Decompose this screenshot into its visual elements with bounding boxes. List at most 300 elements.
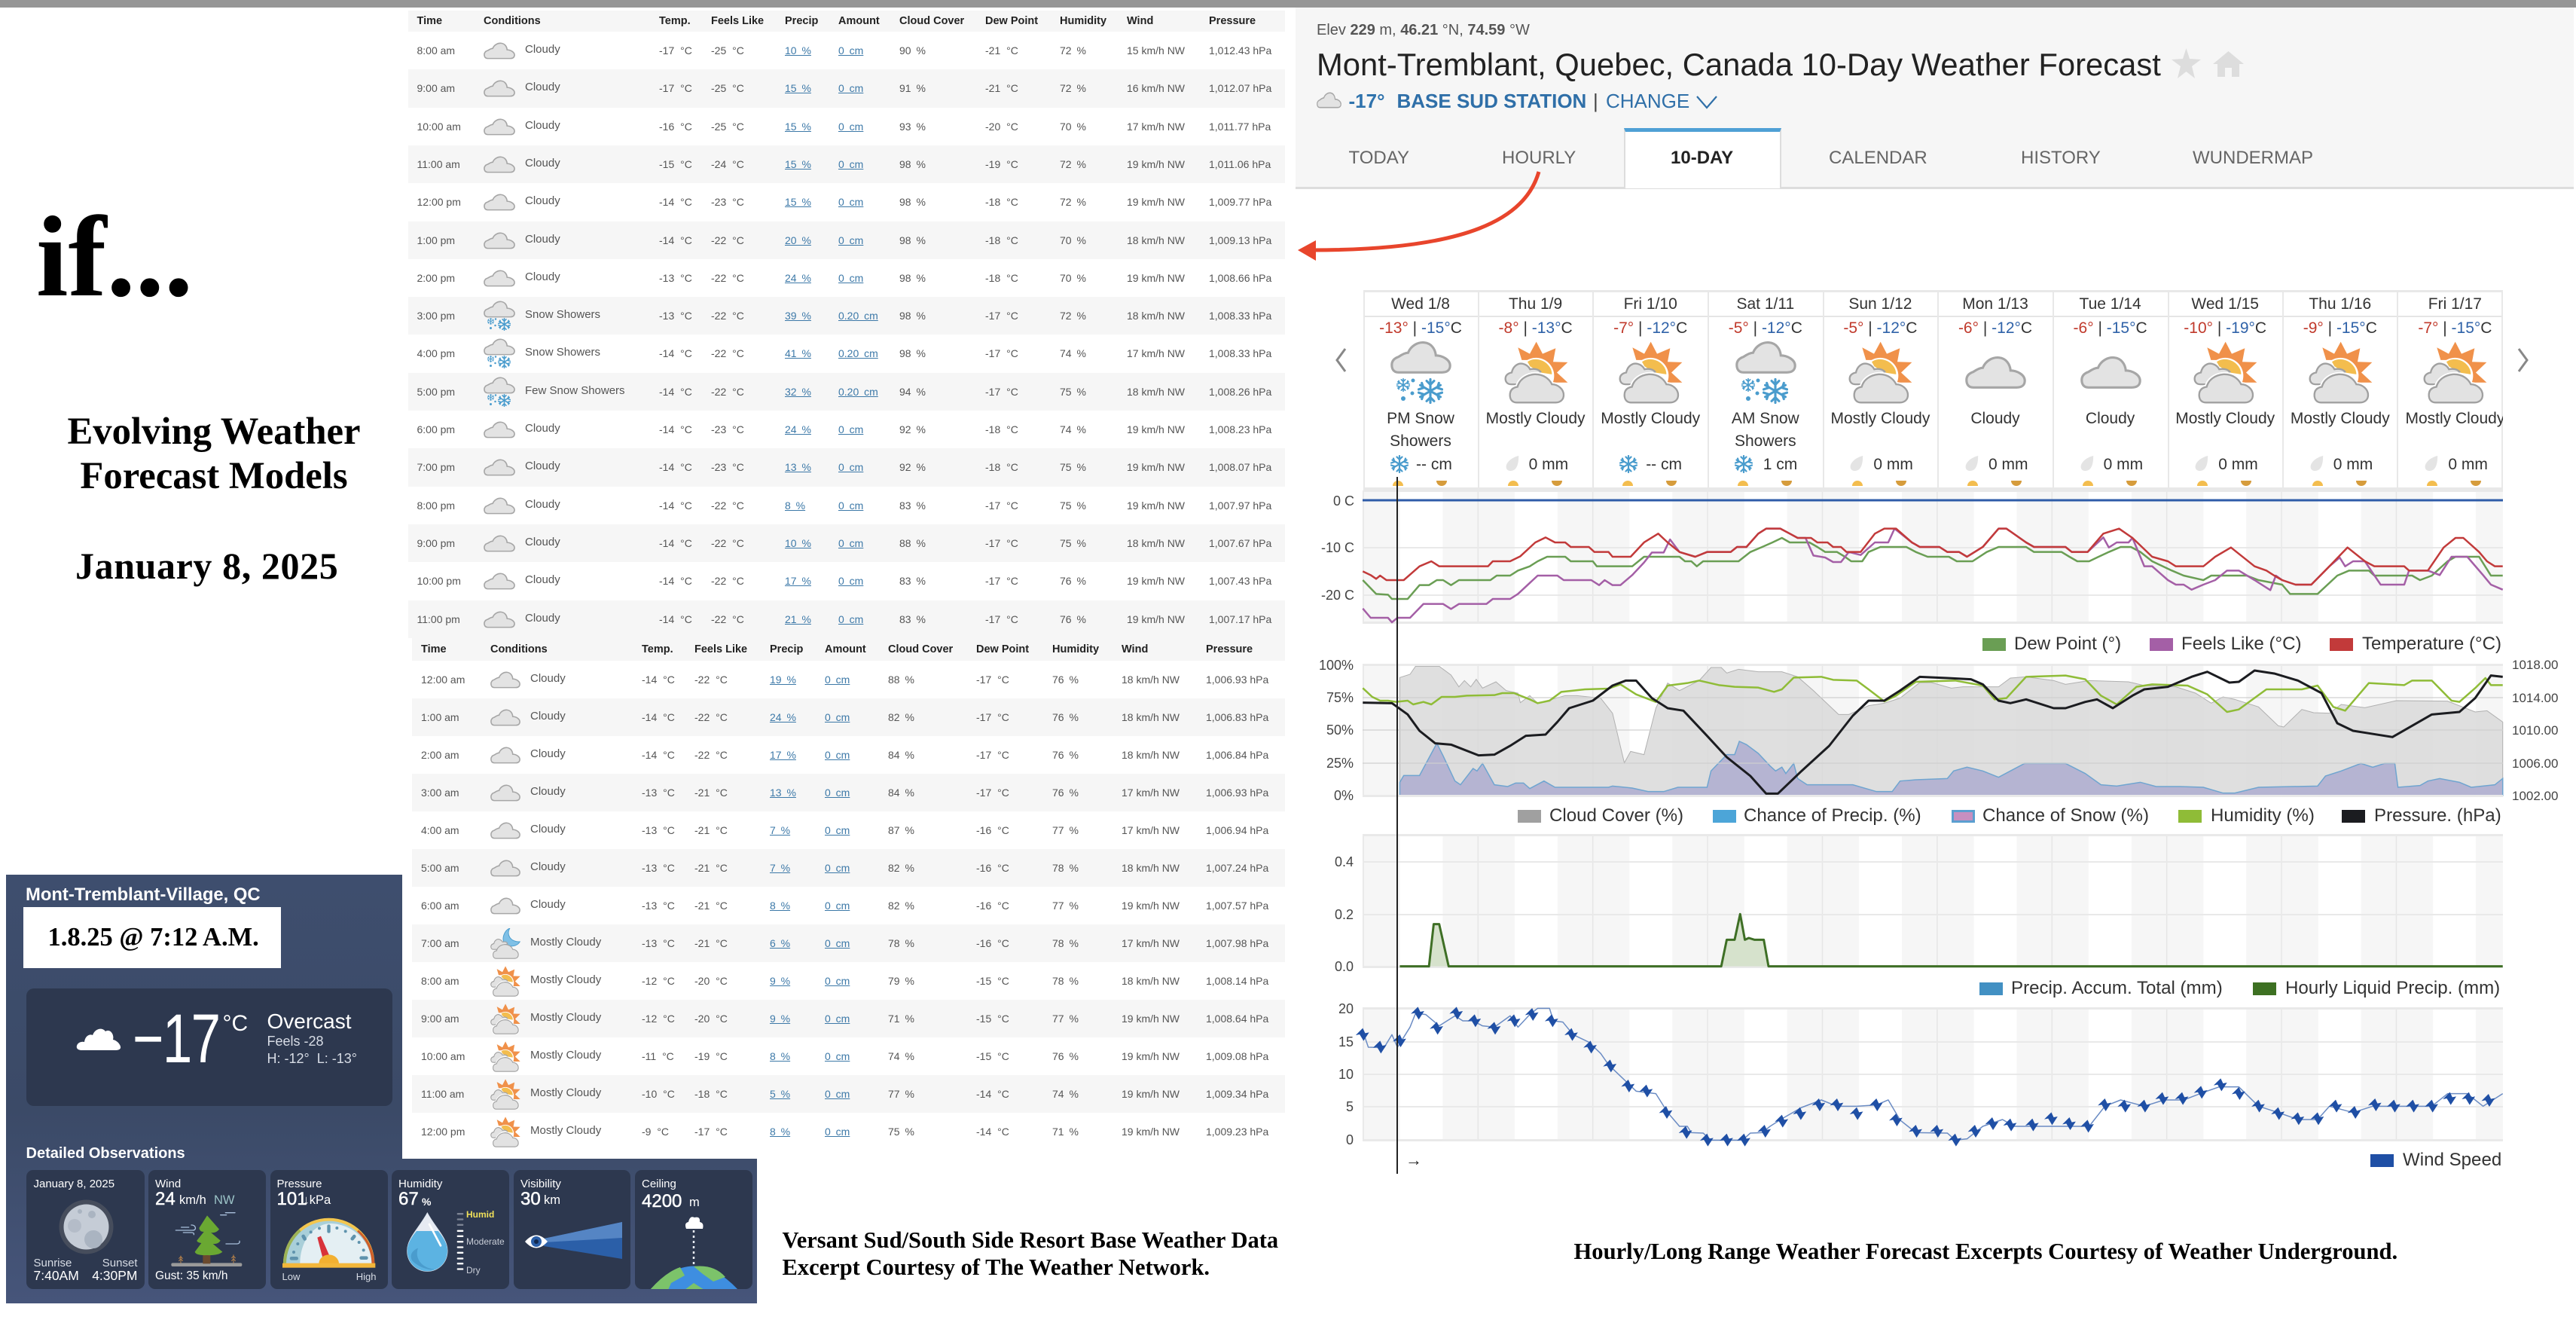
row: 3:00 pm: -22 °C [711, 310, 744, 322]
card: ceiling: Ceiling [642, 1178, 676, 1190]
row: 3:00 pm: 72 % [1060, 310, 1086, 322]
forecast day: Wed 1/8: -- cm [1416, 456, 1452, 473]
caption: The Weather Network credit [782, 1227, 1286, 1281]
forecast day: Fri 1/17: Mostly Cloudy [2405, 410, 2503, 427]
card: visibility: Visibility [520, 1178, 561, 1190]
row: 7:00 pm: 1,008.07 hPa [1209, 461, 1271, 473]
card: pressure: Pressure [277, 1178, 322, 1190]
legend: temperature chart: Temperature (°C) [2362, 634, 2501, 654]
row: 6:00 pm: -23 °C [711, 423, 744, 435]
table header: Temp. [659, 15, 691, 27]
heading: if...: if... [36, 193, 193, 321]
row: 5:00 am: 1,007.24 hPa [1206, 862, 1268, 874]
row: 4:00 pm: 17 km/h NW [1127, 347, 1185, 359]
card: ceiling: m [689, 1196, 700, 1209]
row: 11:00 am: 77 % [888, 1088, 914, 1100]
row: 11:00 am: 1,009.34 hPa [1206, 1088, 1268, 1100]
row: 2:00 pm: -13 °C [659, 272, 692, 284]
row: 7:00 am: 7:00 am [421, 937, 459, 949]
axis labels: wind speed: 0 [1346, 1132, 1354, 1147]
row: 8:00 am: 90 % [899, 44, 926, 57]
row: 9:00 am: 19 km/h NW [1122, 1013, 1180, 1025]
axis labels: precipitation: 0.0 [1335, 959, 1354, 974]
row: 3:00 am: -13 °C [642, 787, 675, 799]
row: 8:00 am: -20 °C [694, 975, 728, 987]
row: 2:00 am: 2:00 am [421, 749, 459, 761]
row: 12:00 am: 0 cm [825, 674, 850, 686]
row: 2:00 am: -22 °C [694, 749, 728, 761]
row: 1:00 pm [408, 221, 1285, 259]
row: 4:00 pm: 41 % [785, 347, 811, 359]
forecast day: Thu 1/9: -8° | -13°C [1499, 319, 1573, 337]
row: 5:00 pm: 18 km/h NW [1127, 386, 1185, 398]
caption: The Weather Network credit: Excerpt Courtesy of The Weather Network. [782, 1254, 1210, 1280]
row: 7:00 am: -13 °C [642, 937, 675, 949]
forecast day: Fri 1/10 [1593, 290, 1708, 490]
row: 12:00 am: 18 km/h NW [1122, 674, 1180, 686]
row: 12:00 am: 19 % [770, 674, 796, 686]
table header: Humidity [1060, 15, 1106, 27]
axis labels: percent: 75% [1326, 690, 1354, 705]
row: 11:00 am: 19 km/h NW [1122, 1088, 1180, 1100]
row: 11:00 am: 11:00 am [421, 1088, 464, 1100]
row: 4:00 am: -21 °C [694, 824, 728, 836]
area: chance of snow [1399, 741, 2503, 796]
row: 8:00 pm [417, 497, 1271, 514]
row: 7:00 pm: 13 % [785, 461, 811, 473]
row: 5:00 am [412, 849, 1285, 887]
row: 8:00 am: 8:00 am [417, 44, 455, 57]
row: 11:00 am: -18 °C [694, 1088, 728, 1100]
legend: temperature chart: Dew Point (°) [2014, 634, 2121, 654]
station name: BASE SUD STATION [1396, 90, 1586, 112]
row: 6:00 pm: -14 °C [659, 423, 692, 435]
forecast day: Tue 1/14: Tue 1/14 [2080, 295, 2141, 313]
row: 11:00 pm: -17 °C [985, 613, 1018, 625]
row: 12:00 pm: 75 % [888, 1126, 914, 1138]
row: 3:00 pm: -13 °C [659, 310, 692, 322]
row: 7:00 am: 0 cm [825, 937, 850, 949]
row: 8:00 am: 79 % [888, 975, 914, 987]
chart: cloud cover, precip, humidity, pressure [1341, 655, 2576, 806]
row: 11:00 am: -24 °C [711, 158, 744, 170]
legend: precipitation chart: Hourly Liquid Precip. (mm) [2285, 978, 2500, 998]
current-time marker line [1396, 477, 1398, 1174]
row: 1:00 pm: -22 °C [711, 234, 744, 246]
row: 9:00 am: 77 % [1052, 1013, 1079, 1025]
table header: Amount [825, 643, 866, 655]
forecast day: Wed 1/8: PM Snow [1387, 410, 1454, 427]
icon: moon [59, 1199, 113, 1254]
row: 12:00 am: 12:00 am [421, 674, 465, 686]
row: 6:00 am: -13 °C [642, 900, 675, 912]
row: 4:00 am: -16 °C [976, 824, 1009, 836]
row: 8:00 am: 0 cm [825, 975, 850, 987]
line: feels like [1363, 529, 2503, 622]
row: 11:00 am: 74 % [1052, 1088, 1079, 1100]
row: 10:00 am: 74 % [888, 1050, 914, 1062]
row: 6:00 pm: 92 % [899, 423, 926, 435]
forecast day: Fri 1/17 [2397, 290, 2503, 490]
condition: Overcast [267, 1010, 352, 1032]
row: 7:00 pm: 0 cm [838, 461, 863, 473]
row: 11:00 pm: 0 cm [838, 613, 863, 625]
timestamp box [23, 907, 281, 968]
tab: wundermap: WUNDERMAP [2193, 148, 2313, 168]
card: wind [148, 1170, 266, 1289]
panel: Weather Underground page header [1296, 8, 2574, 189]
row: 4:00 pm: 74 % [1060, 347, 1086, 359]
axis labels: pressure: 1014.00 [2512, 691, 2558, 705]
card: wind: km/h [179, 1193, 206, 1207]
row: 1:00 pm: -18 °C [985, 234, 1018, 246]
row: 11:00 pm: 1,007.17 hPa [1209, 613, 1271, 625]
table header: Cloud Cover [888, 643, 953, 655]
row: 2:00 am: -17 °C [976, 749, 1009, 761]
row: 11:00 am [408, 145, 1285, 183]
row: 12:00 pm [412, 1113, 1285, 1150]
row: 9:00 am [408, 69, 1285, 108]
axis labels: pressure: 1002.00 [2512, 789, 2558, 803]
row: 11:00 am: -15 °C [659, 158, 692, 170]
row: 1:00 pm: 18 km/h NW [1127, 234, 1185, 246]
card: date and sun: Sunset [102, 1257, 137, 1269]
row: 11:00 am: -19 °C [985, 158, 1018, 170]
row: 2:00 am: 17 % [770, 749, 796, 761]
row: 5:00 am: 7 % [770, 862, 790, 874]
forecast day: Sat 1/11: AM Snow [1732, 410, 1799, 427]
forecast day: Wed 1/8 [1363, 290, 1479, 490]
title: Evolving Weather Forecast Models: Evolving Weather [67, 410, 361, 452]
forecast day: Sat 1/11: Showers [1735, 432, 1796, 450]
row: 5:00 am: -16 °C [976, 862, 1009, 874]
forecast day: Wed 1/8: Wed 1/8 [1391, 295, 1450, 313]
row: 10:00 pm: 1,007.43 hPa [1209, 575, 1271, 587]
row: 7:00 pm: -18 °C [985, 461, 1018, 473]
forecast day: Wed 1/15: -10° | -19°C [2184, 319, 2266, 337]
forecast day: Wed 1/15: 0 mm [2218, 456, 2258, 473]
row: 9:00 pm: 18 km/h NW [1127, 537, 1185, 549]
legend: cloud and pressure chart: Humidity (%) [2211, 805, 2315, 826]
table: hourly forecast Jan 9 [412, 638, 1285, 1147]
white backing for hourly tables [402, 8, 1296, 1159]
axis labels: percent: 50% [1326, 723, 1354, 738]
row: 9:00 am: 72 % [1060, 82, 1086, 94]
row: 1:00 am: -14 °C [642, 711, 675, 723]
row: 8:00 am: -12 °C [642, 975, 675, 987]
axis labels: temperature: 0 C [1333, 493, 1354, 509]
row: 2:00 pm [417, 270, 1271, 286]
legend: cloud and pressure chart: Pressure. (hPa) [2374, 805, 2501, 826]
row: 5:00 pm: -14 °C [659, 386, 692, 398]
row: 1:00 am: 82 % [888, 711, 914, 723]
icon: star [2172, 48, 2201, 78]
row: 9:00 pm: 10 % [785, 537, 811, 549]
row: 5:00 pm: 1,008.26 hPa [1209, 386, 1271, 398]
tab: today: TODAY [1348, 148, 1409, 168]
forecast day: Thu 1/16: Mostly Cloudy [2291, 410, 2390, 427]
row: 8:00 am: 72 % [1060, 44, 1086, 57]
tab: hourly: HOURLY [1502, 148, 1576, 168]
station coordinates: Elev 229 m, 46.21 °N, 74.59 °W [1317, 22, 1530, 38]
row: 11:00 am: 0 cm [838, 158, 863, 170]
row: 10:00 pm: 19 km/h NW [1127, 575, 1185, 587]
row: 1:00 am: 18 km/h NW [1122, 711, 1180, 723]
row: 12:00 am: -14 °C [642, 674, 675, 686]
row: 10:00 am: 0 cm [825, 1050, 850, 1062]
forecast day: Thu 1/9 [1479, 290, 1593, 490]
card: pressure: Low [282, 1271, 300, 1282]
row: 10:00 pm: 17 % [785, 575, 811, 587]
row: 8:00 am [412, 962, 1285, 1000]
row: 1:00 am: 0 cm [825, 711, 850, 723]
axis labels: wind speed: 15 [1338, 1034, 1354, 1049]
row: 6:00 pm: 19 km/h NW [1127, 423, 1185, 435]
row: 5:00 am: 82 % [888, 862, 914, 874]
forecast day: Wed 1/15: Mostly Cloudy [2175, 410, 2275, 427]
row: 2:00 am: 0 cm [825, 749, 850, 761]
forecast day: Sat 1/11: Sat 1/11 [1736, 295, 1794, 313]
forecast day: Sun 1/12: 0 mm [1873, 456, 1913, 473]
table header: Humidity [1052, 643, 1099, 655]
row: 3:00 am: 17 km/h NW [1122, 787, 1180, 799]
forecast day: Tue 1/14 [2053, 290, 2168, 490]
table header: Precip [770, 643, 803, 655]
row: 12:00 pm: 8 % [770, 1126, 790, 1138]
row: 11:00 am: 5 % [770, 1088, 790, 1100]
row: 3:00 pm: 3:00 pm [417, 310, 455, 322]
row: 9:00 am: 1,008.64 hPa [1206, 1013, 1268, 1025]
icon: eye with beam [525, 1222, 622, 1259]
row: 11:00 am: 0 cm [825, 1088, 850, 1100]
row: 11:00 am: 98 % [899, 158, 926, 170]
table header: Time [421, 643, 447, 655]
row: 6:00 pm: 24 % [785, 423, 811, 435]
row: 7:00 am: Mostly Cloudy [530, 936, 601, 949]
row: 6:00 pm: 1,008.23 hPa [1209, 423, 1271, 435]
row: 5:00 am: 18 km/h NW [1122, 862, 1180, 874]
row: 10:00 am: Cloudy [525, 119, 560, 132]
heading: Detailed Observations: Detailed Observations [26, 1145, 185, 1162]
row: 3:00 am [412, 774, 1285, 811]
line: humidity [1363, 676, 2503, 712]
row: 1:00 am: -17 °C [976, 711, 1009, 723]
icons: wind, pressure and humidity illustrations [171, 1212, 464, 1272]
row: 4:00 am: -13 °C [642, 824, 675, 836]
row: 8:00 pm: Cloudy [525, 498, 560, 511]
row: 7:00 am: 1,007.98 hPa [1206, 937, 1268, 949]
legend: wind speed: Wind Speed [2403, 1150, 2501, 1170]
row: 9:00 pm: 88 % [899, 537, 926, 549]
row: 10:00 pm [417, 573, 1271, 589]
row: 3:00 am: Cloudy [530, 785, 566, 798]
table header: Wind [1127, 15, 1153, 27]
row: 1:00 am: 24 % [770, 711, 796, 723]
row: 9:00 am: 15 % [785, 82, 811, 94]
icon: next chevron [2516, 347, 2530, 373]
row: 8:00 am: 0 cm [838, 44, 863, 57]
table: hourly forecast Jan 8 [408, 11, 1285, 638]
forecast day: Tue 1/14: -6° | -15°C [2074, 319, 2147, 337]
forecast day: Wed 1/8: Showers [1390, 432, 1451, 450]
row: 1:00 pm: -14 °C [659, 234, 692, 246]
row: 8:00 am: 18 km/h NW [1122, 975, 1180, 987]
row: 3:00 pm [408, 297, 1285, 335]
axis labels: pressure: 1006.00 [2512, 756, 2558, 771]
row: 3:00 am: 84 % [888, 787, 914, 799]
forecast day: Thu 1/9: Mostly Cloudy [1486, 410, 1586, 427]
row: 4:00 pm: 1,008.33 hPa [1209, 347, 1271, 359]
row: 11:00 am: 11:00 am [417, 158, 460, 170]
row: 8:00 am: 10 % [785, 44, 811, 57]
row: 11:00 am: 1,011.06 hPa [1209, 158, 1271, 170]
icon: chevron [1696, 96, 1717, 108]
row: 10:00 pm: Cloudy [525, 573, 560, 586]
row: 4:00 am [421, 823, 1268, 839]
row: 1:00 pm: 1,009.13 hPa [1209, 234, 1271, 246]
row: 5:00 am: Cloudy [530, 860, 566, 873]
row: 10:00 am: 93 % [899, 121, 926, 133]
row: 4:00 pm: 98 % [899, 347, 926, 359]
table header: Amount [838, 15, 880, 27]
tab: calendar: CALENDAR [1829, 148, 1927, 168]
row: 9:00 am: -15 °C [976, 1013, 1009, 1025]
row: 8:00 pm: 83 % [899, 500, 926, 512]
table header: Conditions [484, 15, 541, 27]
row: 5:00 pm: -22 °C [711, 386, 744, 398]
row: 10:00 am: -19 °C [694, 1050, 728, 1062]
row: 9:00 am: 16 km/h NW [1127, 82, 1185, 94]
legend: temperature chart [1982, 634, 2503, 654]
card: visibility: km [544, 1193, 560, 1207]
row: 11:00 am: 72 % [1060, 158, 1086, 170]
row: 4:00 pm: Snow Showers [525, 346, 600, 359]
forecast day: Fri 1/10: -7° | -12°C [1613, 319, 1687, 337]
row: 3:00 am: 3:00 am [421, 787, 459, 799]
row: 2:00 pm: 24 % [785, 272, 811, 284]
row: 12:00 pm: 1,009.77 hPa [1209, 196, 1271, 208]
row: 8:00 am: 1,012.43 hPa [1209, 44, 1271, 57]
row: 11:00 am: -14 °C [976, 1088, 1009, 1100]
row: 12:00 pm: 12:00 pm [417, 196, 461, 208]
table header: Cloud Cover [899, 15, 964, 27]
tab: 10-day active: 10-DAY [1671, 148, 1733, 168]
row: 9:00 am [412, 1000, 1285, 1037]
high and low: H: -12° L: -13° [267, 1050, 357, 1065]
feels like: Feels -28 [267, 1034, 324, 1049]
row: 2:00 pm: 0 cm [838, 272, 863, 284]
row: 5:00 pm: -17 °C [985, 386, 1018, 398]
row: 10:00 am: -16 °C [659, 121, 692, 133]
station temperature: -17° [1348, 90, 1384, 112]
row: 2:00 am: 84 % [888, 749, 914, 761]
row: 3:00 pm: 0.20 cm [838, 310, 878, 322]
row: 7:00 pm: -23 °C [711, 461, 744, 473]
forecast day: Mon 1/13: -6° | -12°C [1958, 319, 2032, 337]
row: 8:00 am: -17 °C [659, 44, 692, 57]
forecast day: Thu 1/16 [2283, 290, 2397, 490]
row: 5:00 pm: Few Snow Showers [525, 384, 625, 397]
row: 3:00 am: 76 % [1052, 787, 1079, 799]
row: 8:00 pm: 1,007.97 hPa [1209, 500, 1271, 512]
row: 10:00 am: -25 °C [711, 121, 744, 133]
panel: 10-day forecast strip [1363, 290, 2503, 490]
axis labels: wind speed [1333, 1002, 1354, 1147]
row: 4:00 pm: 4:00 pm [417, 347, 455, 359]
row: 7:00 pm: 92 % [899, 461, 926, 473]
card: date and sun: Sunrise [33, 1257, 72, 1269]
row: 6:00 am: 77 % [1052, 900, 1079, 912]
legend: temperature chart: Feels Like (°C) [2181, 634, 2302, 654]
forecast day: Thu 1/16: 0 mm [2333, 456, 2373, 473]
axis labels: temperature: -20 C [1321, 588, 1354, 603]
row: 8:00 pm: 19 km/h NW [1127, 500, 1185, 512]
label: Mont-Tremblant-Village, QC: Mont-Tremblant-Village, QC [26, 884, 261, 905]
row: 8:00 pm: -22 °C [711, 500, 744, 512]
row: 8:00 am: -15 °C [976, 975, 1009, 987]
caption: The Weather Network credit: Versant Sud/South Side Resort Base Weather Data [782, 1227, 1278, 1253]
table header: Pressure [1206, 643, 1253, 655]
icon: station cloud [1317, 92, 1341, 108]
axis labels: temperature: -10 C [1321, 540, 1354, 555]
row: 12:00 am: 76 % [1052, 674, 1079, 686]
row: 2:00 pm: 70 % [1060, 272, 1086, 284]
card: visibility [514, 1170, 630, 1289]
row: 6:00 pm: 74 % [1060, 423, 1086, 435]
row: 3:00 pm: -17 °C [985, 310, 1018, 322]
row: 9:00 pm: 75 % [1060, 537, 1086, 549]
row: 2:00 am: -14 °C [642, 749, 675, 761]
row: 9:00 am: Cloudy [525, 81, 560, 93]
row: 11:00 am: -10 °C [642, 1088, 675, 1100]
axis labels: percent [1318, 658, 1354, 803]
row: 3:00 pm: 39 % [785, 310, 811, 322]
temperature value: −17 [133, 1001, 219, 1077]
row: 7:00 am: 17 km/h NW [1122, 937, 1180, 949]
row: 12:00 pm: 72 % [1060, 196, 1086, 208]
axis labels: wind speed: 5 [1346, 1099, 1354, 1114]
row: 6:00 am: 0 cm [825, 900, 850, 912]
row: 8:00 am: 78 % [1052, 975, 1079, 987]
icon: humidity drop and scale [407, 1213, 463, 1271]
row: 8:00 pm: 75 % [1060, 500, 1086, 512]
caption: Weather Underground credit: Hourly/Long Range Weather Forecast Excerpts Courtesy of Weather Underground. [1574, 1239, 2397, 1264]
area: second precipitation peak [1721, 914, 1769, 967]
legend: cloud and pressure chart: Cloud Cover (%) [1549, 805, 1683, 826]
row: 4:00 pm: 0.20 cm [838, 347, 878, 359]
row: 1:00 am: Cloudy [530, 710, 566, 723]
row: 11:00 pm: 76 % [1060, 613, 1086, 625]
legend: cloud and pressure chart: Chance of Snow (%) [1982, 805, 2149, 826]
row: 12:00 pm: -17 °C [694, 1126, 728, 1138]
axis labels: percent: 100% [1319, 658, 1354, 673]
row: 2:00 am: Cloudy [530, 747, 566, 760]
row: 9:00 am: 91 % [899, 82, 926, 94]
date: January 8, 2025: January 8, 2025 [75, 545, 338, 587]
row: 5:00 am: 0 cm [825, 862, 850, 874]
row: 6:00 am: 1,007.57 hPa [1206, 900, 1268, 912]
row: 6:00 pm: Cloudy [525, 422, 560, 435]
axis labels: temperature [1318, 493, 1354, 603]
row: 12:00 pm: 19 km/h NW [1122, 1126, 1180, 1138]
table header: Feels Like [711, 15, 764, 27]
table header: Time [417, 15, 442, 27]
row: 10:00 am: 70 % [1060, 121, 1086, 133]
row: 7:00 pm: 19 km/h NW [1127, 461, 1185, 473]
table header: Dew Point [985, 15, 1038, 27]
icon: pressure gauge [282, 1218, 375, 1268]
row: 9:00 am: 1,012.07 hPa [1209, 82, 1271, 94]
